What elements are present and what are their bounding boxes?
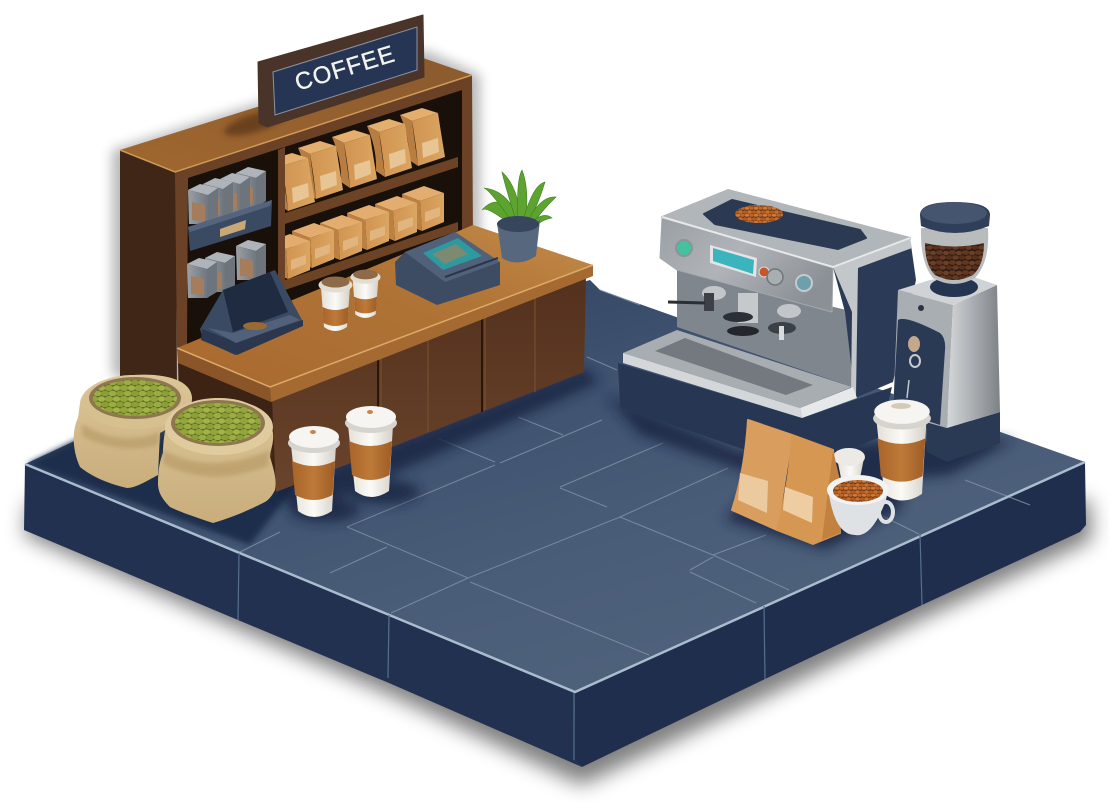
left compartment filler (262, 150, 278, 302)
shelf top edge highlight (120, 75, 472, 172)
left bag (732, 420, 792, 530)
grinder front face (893, 290, 953, 428)
upper shelf board (285, 157, 458, 224)
coffee grinder (893, 202, 1000, 462)
machine head front (660, 217, 833, 312)
drip grate (655, 338, 813, 395)
counter panel seams (378, 318, 482, 452)
hopper glass (921, 228, 988, 284)
cash register left (200, 270, 303, 355)
bottom row coffee bags (268, 186, 444, 279)
blue dial (796, 275, 812, 291)
front sack (158, 398, 276, 523)
machine side (833, 238, 916, 398)
small cup behind bags (833, 448, 865, 478)
plant leaves (482, 170, 556, 230)
grinder top (898, 274, 997, 305)
grinder right face (947, 285, 1000, 428)
green button (676, 240, 692, 256)
counter top edge highlight (177, 265, 593, 387)
sign panel (273, 27, 417, 115)
top tray (704, 200, 866, 249)
mug handle (879, 502, 893, 522)
sign frame (258, 15, 424, 127)
sign text: COFFEE (292, 40, 399, 96)
shelf unit top (120, 58, 472, 172)
side silver trim (833, 238, 912, 395)
counter top left lip (177, 348, 271, 402)
coffee bean bags (732, 420, 840, 544)
platform floor (24, 280, 1086, 767)
machine base (618, 363, 892, 470)
counter body left face (178, 360, 276, 492)
control display (710, 245, 757, 277)
blue shelf tray (188, 200, 272, 251)
platform drop shadow (24, 500, 1092, 785)
shelf interior (187, 90, 462, 345)
mug of roasted beans (827, 475, 893, 535)
ground beans in hopper (925, 243, 984, 280)
potted plant (482, 170, 556, 263)
top row coffee bags (270, 108, 445, 211)
large takeaway cup (873, 399, 931, 501)
shelf unit front frame (175, 75, 473, 350)
shelf unit soft shadow (112, 50, 480, 400)
lower shelf board (285, 222, 458, 290)
mug beans (833, 480, 883, 502)
takeaway cups on counter (318, 270, 381, 331)
grinder dispenser knob (908, 336, 920, 352)
hopper collar (930, 277, 978, 297)
counter top (177, 225, 593, 387)
counter top right lip (270, 265, 593, 402)
takeaway cups on floor (288, 406, 397, 517)
grinder control panel (893, 319, 945, 425)
left compartment lower boxes (187, 240, 266, 298)
machine back panel (677, 270, 855, 387)
drip tray top (623, 330, 852, 408)
orange beans on top tray (735, 205, 783, 223)
red button (759, 267, 769, 277)
dark back-left floor strip (27, 418, 300, 545)
counter body front face (272, 276, 586, 492)
sign shadow (222, 105, 288, 141)
back sack (74, 375, 192, 488)
payment terminal (395, 232, 500, 305)
right bag (777, 435, 840, 544)
burlap sacks of green beans (74, 375, 276, 523)
centre divider (278, 147, 285, 295)
head edge highlight (662, 217, 910, 267)
shelf unit side panel (120, 150, 177, 400)
floor tile joints (240, 290, 1030, 655)
espresso machine (618, 190, 916, 470)
platform top surface (25, 280, 1085, 692)
plant pot (497, 220, 540, 263)
counter and shelving unit (112, 50, 593, 492)
silver dial (767, 269, 783, 285)
group heads (668, 286, 801, 340)
mug body (828, 488, 888, 535)
platform left side faces (24, 464, 582, 767)
left compartment upper boxes (188, 167, 266, 224)
drip tray front bezel (623, 353, 802, 418)
coffee sign (222, 15, 424, 141)
hopper lid (920, 202, 990, 233)
object contact shadows (270, 368, 1015, 550)
side face seams (238, 534, 922, 760)
machine head top (662, 190, 910, 267)
grinder base (893, 412, 1000, 462)
platform edge highlight (25, 462, 1085, 692)
platform right side faces (574, 462, 1086, 767)
